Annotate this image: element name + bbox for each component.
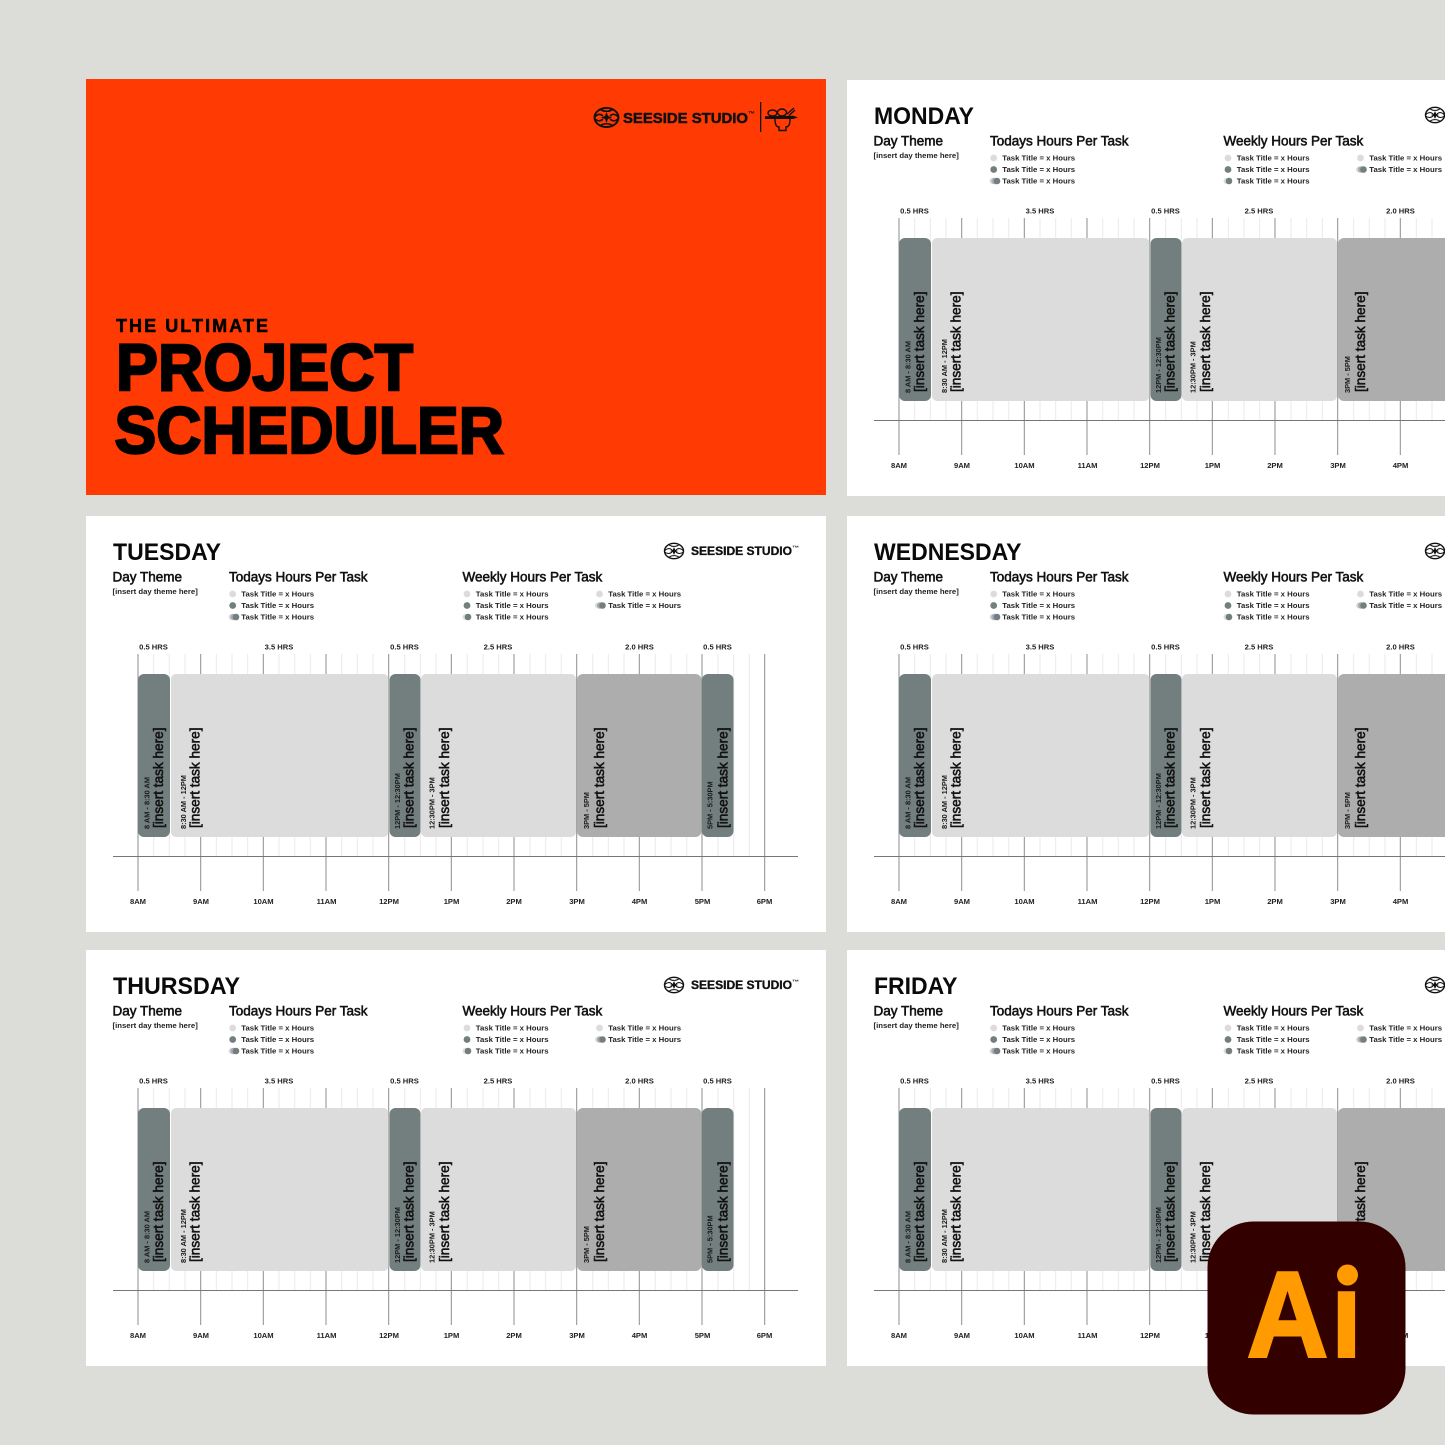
legend: weekly hours: Task Title = x Hours: [608, 601, 681, 610]
task block: 8am: 8 AM - 8:30 AM: [142, 1211, 152, 1263]
legend: weekly hours: Task Title = x Hours: [1237, 601, 1310, 610]
task block: 8am: 8 AM - 8:30 AM: [904, 1211, 912, 1263]
timeline grid: [874, 1088, 1445, 1325]
duration labels: [900, 206, 1415, 216]
hour axis labels: 2PM: [1267, 897, 1283, 906]
day theme: Day Theme: [112, 1004, 182, 1018]
duration labels: [139, 1076, 732, 1086]
timeline grid: [874, 218, 1445, 455]
task block: 3pm: [1338, 674, 1445, 837]
logo: Seeside Studio: [664, 543, 799, 559]
legend: weekly hours: Task Title = x Hours: [476, 601, 549, 610]
legend: weekly hours: Task Title = x Hours: [1237, 1047, 1310, 1056]
task block: 12:30pm: [1182, 1108, 1337, 1271]
icon: Adobe Illustrator badge: [1208, 1222, 1406, 1414]
hour axis labels: 4PM: [1393, 897, 1408, 906]
task block: 12pm: [insert task here]: [1162, 1162, 1178, 1262]
task block: 3pm: 3PM - 5PM: [582, 1226, 591, 1263]
task block: 12:30pm: [insert task here]: [1198, 728, 1213, 828]
heading: the ultimate: THE ULTIMATE: [116, 316, 268, 336]
hour axis labels: 9AM: [954, 461, 970, 470]
legend: weekly hours: Weekly Hours Per Task: [1224, 1004, 1364, 1018]
legend: weekly hours: Weekly Hours Per Task: [462, 1004, 603, 1018]
legend: todays hours: Task Title = x Hours: [241, 1035, 314, 1044]
duration labels: 2.0 HRS: [625, 642, 654, 652]
logo: Seeside Studio: SEESIDE STUDIO: [691, 978, 792, 992]
hour axis labels: [891, 461, 1408, 470]
day title: WEDNESDAY: [874, 539, 1022, 566]
hour axis labels: 12PM: [1140, 461, 1160, 470]
panel: monday: [847, 80, 1445, 496]
task block: 5pm: [insert task here]: [716, 1162, 730, 1262]
legend: weekly hours: [1224, 1004, 1442, 1056]
hour axis labels: 10AM: [1014, 897, 1035, 906]
panel: friday: [847, 950, 1445, 1366]
task block: 12pm: 12PM - 12:30PM: [1154, 1207, 1163, 1263]
task block: 3pm: [insert task here]: [592, 1162, 607, 1262]
task block: 8am: [insert task here]: [912, 1162, 927, 1262]
legend: todays hours: [228, 570, 368, 622]
task block: 12pm: [1150, 674, 1182, 837]
legend: weekly hours: Task Title = x Hours: [476, 1047, 549, 1056]
duration labels: 3.5 HRS: [1026, 1076, 1054, 1086]
legend: weekly hours: Task Title = x Hours: [608, 590, 681, 599]
hour axis labels: 1PM: [1205, 461, 1220, 470]
legend: weekly hours: Task Title = x Hours: [1237, 154, 1310, 163]
legend: weekly hours: [1224, 570, 1442, 622]
duration labels: 2.5 HRS: [1245, 1076, 1273, 1086]
day theme: [insert day theme here]: [874, 1021, 959, 1030]
task block: 8:30am: [insert task here]: [948, 292, 964, 392]
task block: 12:30pm: [insert task here]: [437, 728, 452, 828]
hour axis labels: 5PM: [695, 1331, 710, 1340]
hour axis labels: 2PM: [506, 1331, 522, 1340]
task block: 8:30am: [171, 1108, 388, 1271]
task block: 12pm: [insert task here]: [1162, 292, 1178, 392]
duration labels: 0.5 HRS: [139, 642, 168, 652]
task block: 3pm: [577, 674, 702, 837]
hour axis labels: [130, 1331, 772, 1340]
task block: 8:30am: [insert task here]: [948, 728, 964, 828]
task block: 12:30pm: [1182, 238, 1337, 401]
legend: weekly hours: Task Title = x Hours: [1369, 1035, 1442, 1044]
hour axis labels: 3PM: [1330, 897, 1346, 906]
logo: Seeside Studio on cover: [594, 102, 798, 132]
duration labels: 2.0 HRS: [1386, 642, 1415, 652]
hour axis labels: 11AM: [1078, 897, 1097, 906]
legend: todays hours: Task Title = x Hours: [1002, 590, 1075, 599]
task block: 3pm: [577, 1108, 702, 1271]
hour axis labels: 1PM: [444, 897, 459, 906]
legend: weekly hours: Task Title = x Hours: [1237, 613, 1310, 622]
legend: todays hours: [228, 1004, 368, 1056]
task block: 12:30pm: 12:30PM - 3PM: [1188, 1211, 1198, 1263]
hour axis labels: [891, 1331, 1408, 1340]
legend: weekly hours: Task Title = x Hours: [1369, 1024, 1442, 1033]
hour axis labels: 1PM: [444, 1331, 459, 1340]
task block: 8am: [insert task here]: [912, 728, 927, 828]
legend: weekly hours: Task Title = x Hours: [1237, 1024, 1310, 1033]
legend: todays hours: Task Title = x Hours: [1002, 613, 1075, 622]
legend: weekly hours: Weekly Hours Per Task: [1224, 570, 1364, 584]
legend: todays hours: [990, 134, 1129, 186]
panel: thursday: [86, 950, 826, 1366]
legend: weekly hours: Task Title = x Hours: [476, 1035, 549, 1044]
timeline grid: [874, 654, 1445, 891]
hour axis labels: 12PM: [1140, 1331, 1160, 1340]
task block: 12pm: 12PM - 12:30PM: [393, 1207, 402, 1263]
hour axis labels: 8AM: [130, 1331, 146, 1340]
duration labels: 0.5 HRS: [1151, 642, 1180, 652]
hour axis labels: 11AM: [317, 1331, 336, 1340]
hour axis labels: 6PM: [757, 897, 772, 906]
legend: weekly hours: Task Title = x Hours: [476, 613, 549, 622]
day theme: Day Theme: [874, 1004, 943, 1018]
legend: weekly hours: Task Title = x Hours: [1369, 601, 1442, 610]
logo icon: [1426, 107, 1444, 123]
hour axis labels: 2PM: [1267, 461, 1283, 470]
hour axis labels: 10AM: [1014, 1331, 1035, 1340]
logo: Seeside Studio: SEESIDE STUDIO: [691, 544, 792, 558]
task block: 12:30pm: [421, 674, 576, 837]
hour axis labels: 1PM: [1205, 1331, 1220, 1340]
legend: todays hours: Todays Hours Per Task: [229, 570, 368, 584]
legend: weekly hours: Task Title = x Hours: [608, 1024, 681, 1033]
task block: 12:30pm: 12:30PM - 3PM: [428, 1211, 436, 1263]
task block: 12pm: [1150, 1108, 1182, 1271]
duration labels: 0.5 HRS: [390, 642, 419, 652]
task block: 12:30pm: [421, 1108, 576, 1271]
task block: 12pm: [1150, 238, 1182, 401]
day theme: [874, 570, 959, 596]
task block: 5pm: [702, 674, 734, 837]
task block: 8:30am: 8:30 AM - 12PM: [179, 1209, 188, 1263]
heading: scheduler: SCHEDULER: [114, 393, 504, 467]
legend: todays hours: Todays Hours Per Task: [990, 1004, 1129, 1018]
hour axis labels: 8AM: [891, 1331, 907, 1340]
hour axis labels: 9AM: [954, 897, 970, 906]
legend: todays hours: Task Title = x Hours: [1002, 177, 1075, 186]
duration labels: 2.0 HRS: [1386, 1076, 1415, 1086]
logo icon: [1426, 977, 1444, 993]
duration labels: [139, 642, 732, 652]
timeline grid: [113, 654, 798, 891]
legend: weekly hours: Task Title = x Hours: [1369, 590, 1442, 599]
heading: project: PROJECT: [116, 330, 413, 404]
hour axis labels: 10AM: [253, 1331, 274, 1340]
legend: todays hours: Todays Hours Per Task: [990, 570, 1129, 584]
task block: 8:30am: 8:30 AM - 12PM: [940, 339, 949, 393]
logo: Seeside Studio on cover: ™: [748, 111, 755, 118]
day theme: Day Theme: [874, 570, 943, 584]
task block: 8am: [899, 1108, 931, 1271]
duration labels: 2.5 HRS: [1245, 206, 1273, 216]
task block: 12pm: 12PM - 12:30PM: [393, 773, 402, 829]
hour axis labels: 9AM: [954, 1331, 970, 1340]
task block: 12:30pm: [insert task here]: [437, 1162, 452, 1262]
task block: 3pm: [insert task here]: [1353, 728, 1368, 828]
legend: weekly hours: Task Title = x Hours: [1237, 590, 1310, 599]
legend: weekly hours: Weekly Hours Per Task: [462, 570, 603, 584]
legend: weekly hours: Task Title = x Hours: [1237, 177, 1310, 186]
duration labels: 0.5 HRS: [703, 1076, 732, 1086]
duration labels: 3.5 HRS: [1026, 206, 1054, 216]
day theme: [874, 134, 959, 160]
legend: todays hours: Task Title = x Hours: [1002, 154, 1075, 163]
task block: 12:30pm: [insert task here]: [1198, 292, 1213, 392]
legend: weekly hours: Weekly Hours Per Task: [1224, 134, 1364, 148]
task block: 8am: 8 AM - 8:30 AM: [904, 341, 912, 393]
panel: cover: [86, 79, 826, 495]
task block: 8am: [138, 1108, 170, 1271]
task block: 8:30am: 8:30 AM - 12PM: [179, 775, 188, 829]
timeline grid: [113, 1088, 798, 1325]
legend: todays hours: [990, 570, 1129, 622]
task block: 8:30am: 8:30 AM - 12PM: [940, 1209, 949, 1263]
icon: Adobe Illustrator badge: i: [1329, 1244, 1364, 1385]
task block: 8am: 8 AM - 8:30 AM: [904, 777, 912, 829]
icon: Adobe Illustrator badge: A: [1247, 1246, 1328, 1382]
day theme: [insert day theme here]: [112, 587, 198, 596]
legend: todays hours: Todays Hours Per Task: [229, 1004, 368, 1018]
task block: 3pm: [1338, 1108, 1445, 1271]
duration labels: 2.5 HRS: [484, 642, 512, 652]
hour axis labels: 4PM: [1393, 461, 1408, 470]
hour axis labels: 4PM: [632, 1331, 647, 1340]
hour axis labels: 12PM: [379, 1331, 399, 1340]
task block: 3pm: 3PM - 5PM: [582, 792, 591, 829]
legend: todays hours: Task Title = x Hours: [241, 613, 314, 622]
hour axis labels: 8AM: [891, 897, 907, 906]
day title: TUESDAY: [113, 539, 221, 566]
legend: weekly hours: Task Title = x Hours: [476, 1024, 549, 1033]
task block: 8am: 8 AM - 8:30 AM: [142, 777, 152, 829]
hour axis labels: 2PM: [506, 897, 522, 906]
day theme: Day Theme: [112, 570, 182, 584]
day theme: [insert day theme here]: [874, 151, 959, 160]
task block: 8am: [899, 238, 931, 401]
duration labels: 0.5 HRS: [1151, 206, 1180, 216]
task block: 8:30am: [insert task here]: [188, 1162, 202, 1262]
task block: 5pm: [insert task here]: [716, 728, 730, 828]
task block: 12pm: [insert task here]: [1162, 728, 1178, 828]
task block: 3pm: 3PM - 5PM: [1343, 1226, 1352, 1263]
task block: 8am: [899, 674, 931, 837]
duration labels: 0.5 HRS: [139, 1076, 168, 1086]
day theme: [112, 570, 198, 596]
task block: 12pm: [insert task here]: [402, 1162, 416, 1262]
task block: 8am: [insert task here]: [151, 728, 166, 828]
hour axis labels: 11AM: [1078, 461, 1097, 470]
task block: 3pm: 3PM - 5PM: [1343, 356, 1352, 393]
task block: 5pm: [702, 1108, 734, 1271]
duration labels: [900, 642, 1415, 652]
logo: Seeside Studio: ™: [792, 980, 799, 986]
hour axis labels: 3PM: [1330, 1331, 1346, 1340]
legend: todays hours: Task Title = x Hours: [1002, 1024, 1075, 1033]
day title: FRIDAY: [874, 973, 958, 1000]
hour axis labels: 5PM: [695, 897, 710, 906]
hour axis labels: 3PM: [569, 1331, 585, 1340]
day title: MONDAY: [874, 103, 974, 130]
legend: weekly hours: Task Title = x Hours: [608, 1035, 681, 1044]
task block: 12:30pm: [1182, 674, 1337, 837]
day theme: Day Theme: [874, 134, 943, 148]
logo: Seeside Studio: [664, 977, 799, 993]
task block: 3pm: [1338, 238, 1445, 401]
task block: 8am: [insert task here]: [912, 292, 927, 392]
day title: THURSDAY: [113, 973, 240, 1000]
hour axis labels: 4PM: [1393, 1331, 1408, 1340]
legend: weekly hours: [462, 1004, 681, 1056]
task block: 12pm: 12PM - 12:30PM: [1154, 337, 1163, 393]
duration labels: 2.0 HRS: [1386, 206, 1415, 216]
legend: weekly hours: Task Title = x Hours: [1237, 165, 1310, 174]
panel: tuesday: [86, 516, 826, 932]
hour axis labels: 12PM: [1140, 897, 1160, 906]
task block: 8:30am: [insert task here]: [188, 728, 202, 828]
duration labels: 0.5 HRS: [900, 1076, 929, 1086]
hour axis labels: 11AM: [317, 897, 336, 906]
duration labels: 0.5 HRS: [390, 1076, 419, 1086]
legend: todays hours: Task Title = x Hours: [241, 590, 314, 599]
task block: 8:30am: 8:30 AM - 12PM: [940, 775, 949, 829]
logo: Seeside Studio: ™: [792, 546, 799, 552]
hour axis labels: 2PM: [1267, 1331, 1283, 1340]
duration labels: [900, 1076, 1415, 1086]
legend: todays hours: Task Title = x Hours: [1002, 601, 1075, 610]
hour axis labels: 10AM: [253, 897, 274, 906]
legend: todays hours: Task Title = x Hours: [241, 1024, 314, 1033]
task block: 8:30am: [932, 238, 1150, 401]
legend: todays hours: Task Title = x Hours: [1002, 1035, 1075, 1044]
panel: wednesday: [847, 516, 1445, 932]
legend: weekly hours: [1224, 134, 1442, 186]
hour axis labels: 8AM: [891, 461, 907, 470]
task block: 12:30pm: 12:30PM - 3PM: [428, 777, 436, 829]
day theme: [112, 1004, 198, 1030]
hour axis labels: 1PM: [1205, 897, 1220, 906]
legend: weekly hours: Task Title = x Hours: [1369, 165, 1442, 174]
task block: 12pm: [insert task here]: [402, 728, 416, 828]
legend: todays hours: Task Title = x Hours: [1002, 165, 1075, 174]
legend: weekly hours: [462, 570, 681, 622]
hour axis labels: 6PM: [757, 1331, 772, 1340]
hour axis labels: 3PM: [569, 897, 585, 906]
duration labels: 3.5 HRS: [1026, 642, 1054, 652]
hour axis labels: 9AM: [193, 1331, 209, 1340]
legend: todays hours: Task Title = x Hours: [1002, 1047, 1075, 1056]
duration labels: 3.5 HRS: [265, 1076, 293, 1086]
task block: 3pm: [insert task here]: [1353, 292, 1368, 392]
hour axis labels: 4PM: [632, 897, 647, 906]
task block: 5pm: 5PM - 5:30PM: [706, 781, 714, 829]
legend: weekly hours: Task Title = x Hours: [1237, 1035, 1310, 1044]
day theme: [insert day theme here]: [874, 587, 959, 596]
hour axis labels: 10AM: [1014, 461, 1035, 470]
hour axis labels: [891, 897, 1408, 906]
task block: 3pm: [insert task here]: [592, 728, 607, 828]
legend: todays hours: Task Title = x Hours: [241, 1047, 314, 1056]
task block: 8:30am: [171, 674, 388, 837]
day theme: [insert day theme here]: [112, 1021, 198, 1030]
duration labels: 3.5 HRS: [265, 642, 293, 652]
task block: 12pm: 12PM - 12:30PM: [1154, 773, 1163, 829]
duration labels: 0.5 HRS: [900, 206, 929, 216]
duration labels: 2.5 HRS: [1245, 642, 1273, 652]
task block: 12:30pm: 12:30PM - 3PM: [1188, 777, 1198, 829]
hour axis labels: [130, 897, 772, 906]
task block: 8am: [insert task here]: [151, 1162, 166, 1262]
task block: 8:30am: [insert task here]: [948, 1162, 964, 1262]
legend: todays hours: Todays Hours Per Task: [990, 134, 1129, 148]
task block: 5pm: 5PM - 5:30PM: [706, 1215, 714, 1263]
task block: 12pm: [390, 1108, 420, 1271]
duration labels: 2.5 HRS: [484, 1076, 512, 1086]
hour axis labels: 11AM: [1078, 1331, 1097, 1340]
duration labels: 0.5 HRS: [1151, 1076, 1180, 1086]
legend: weekly hours: Task Title = x Hours: [476, 590, 549, 599]
task block: 12pm: [390, 674, 420, 837]
hour axis labels: 9AM: [193, 897, 209, 906]
duration labels: 0.5 HRS: [900, 642, 929, 652]
task block: 8am: [138, 674, 170, 837]
logo icon: [1426, 543, 1444, 559]
task block: 3pm: 3PM - 5PM: [1343, 792, 1352, 829]
hour axis labels: 8AM: [130, 897, 146, 906]
task block: 12:30pm: [insert task here]: [1198, 1162, 1213, 1262]
legend: weekly hours: Task Title = x Hours: [1369, 154, 1442, 163]
day theme: [874, 1004, 959, 1030]
duration labels: 0.5 HRS: [703, 642, 732, 652]
task block: 8:30am: [932, 674, 1150, 837]
legend: todays hours: [990, 1004, 1129, 1056]
logo: Seeside Studio on cover: SEESIDE STUDIO: [623, 110, 748, 127]
task block: 3pm: [insert task here]: [1353, 1162, 1368, 1262]
task block: 12:30pm: 12:30PM - 3PM: [1188, 341, 1198, 393]
duration labels: 2.0 HRS: [625, 1076, 654, 1086]
hour axis labels: 3PM: [1330, 461, 1346, 470]
task block: 8:30am: [932, 1108, 1150, 1271]
legend: todays hours: Task Title = x Hours: [241, 601, 314, 610]
hour axis labels: 12PM: [379, 897, 399, 906]
